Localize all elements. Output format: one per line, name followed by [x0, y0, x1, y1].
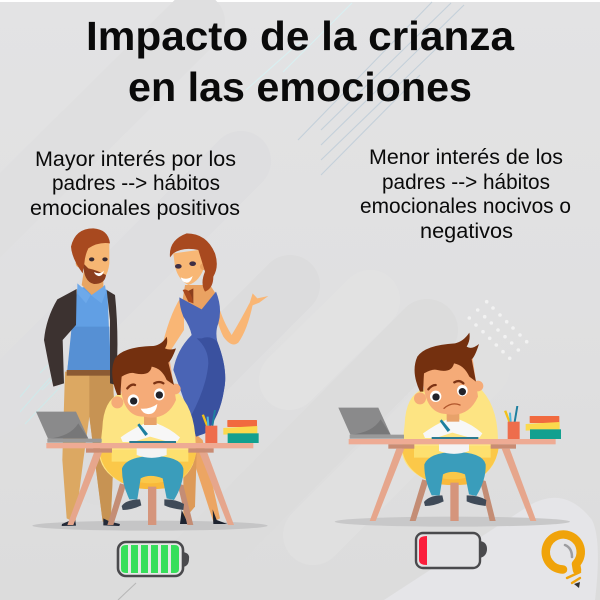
text: negative habits: Menor interés de los [369, 146, 563, 169]
title: en las emociones [128, 64, 472, 110]
title: Impacto de la crianza [86, 13, 515, 59]
text: positive habits: padres --> hábitos [52, 172, 220, 195]
sad child head [414, 333, 483, 422]
title [86, 13, 515, 110]
father [44, 228, 120, 526]
desk, chair and child body [338, 386, 561, 521]
ground shadow [32, 521, 268, 531]
text: negative habits: emocionales nocivos o [360, 195, 571, 218]
text: positive habits: emocionales positivos [30, 197, 240, 220]
text: negative habits [360, 146, 571, 243]
illustration: parents and happy child at desk [32, 228, 268, 531]
text: negative habits: negativos [420, 220, 513, 243]
decorative dot grid [468, 300, 528, 360]
illustration: sad child alone at desk [335, 333, 570, 527]
text: positive habits: Mayor interés por los [35, 148, 236, 171]
desk, chair and child body [36, 390, 259, 525]
icon: full battery [118, 542, 189, 576]
decorative diagonal lines [20, 2, 464, 600]
happy child head [111, 337, 181, 425]
text: positive habits [30, 148, 240, 220]
mother [161, 233, 268, 524]
icon: empty battery [416, 533, 487, 568]
logo: lightbulb pencil [546, 535, 581, 588]
ground shadow [335, 517, 570, 527]
text: negative habits: padres --> hábitos [382, 171, 550, 194]
